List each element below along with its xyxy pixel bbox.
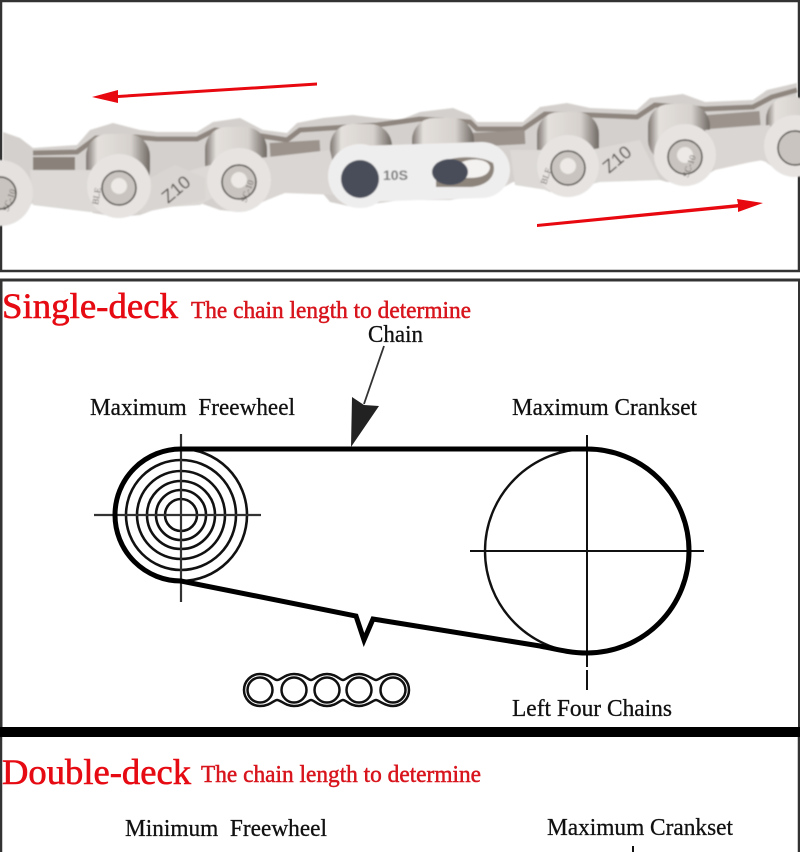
plate stamps SC-10: SC-10 [238, 178, 256, 204]
heading: single-deck: Single-deck [2, 286, 178, 326]
icon: chain links [244, 674, 409, 706]
quick link plate: 10S [383, 167, 408, 183]
heading: double-deck: The chain length to determine [201, 762, 481, 788]
arrow: red pointing right [537, 199, 763, 227]
icon: crankset circle [470, 435, 704, 690]
arrow: chain pointer [351, 346, 384, 447]
plate stamps SC-10 [0, 153, 698, 213]
plate stamps SC-10: BLE [90, 186, 103, 205]
icon: freewheel concentric sprockets [94, 434, 261, 602]
heading: single-deck [2, 286, 471, 326]
panel: single-deck diagram border [1, 280, 800, 727]
chain loop path [115, 449, 689, 653]
plate stamps SC-10: BLE [538, 166, 554, 186]
heading: double-deck: Double-deck [2, 752, 191, 792]
quick link plate [328, 144, 494, 208]
label: maximum crankset lower: Maximum Crankset [547, 815, 733, 841]
label: left four chains: Left Four Chains [512, 696, 672, 722]
plate stamp Z10 left: Z10 [158, 172, 194, 207]
heading: single-deck: The chain length to determine [191, 298, 471, 324]
panel: chain photo [0, 1, 800, 271]
heading: double-deck [2, 752, 481, 792]
plate stamps SC-10: SC-10 [0, 187, 18, 213]
label: maximum freewheel: Maximum Freewheel [90, 395, 295, 421]
arrow: red pointing left [92, 82, 317, 103]
crankset axis stub [632, 846, 634, 852]
label: minimum freewheel: Minimum Freewheel [125, 816, 327, 842]
label: chain: Chain [368, 322, 423, 348]
plate stamps SC-10: SC-10 [680, 153, 698, 179]
plate stamp Z10 right: Z10 [599, 142, 635, 177]
divider band [0, 727, 800, 737]
chain photograph illustration [0, 83, 800, 226]
label: maximum crankset: Maximum Crankset [512, 395, 697, 421]
panel: double-deck border [1, 737, 799, 852]
